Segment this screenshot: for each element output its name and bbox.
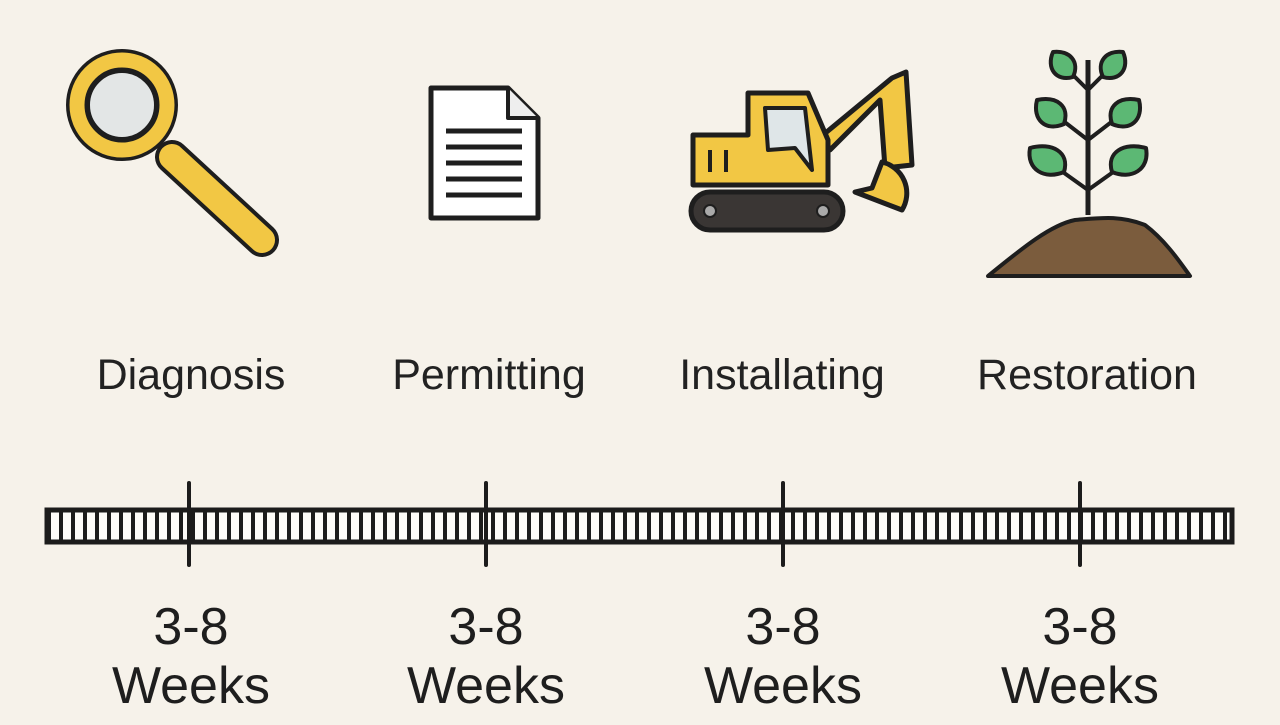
duration: phase 1: Weeks xyxy=(112,657,270,715)
duration: phase 1 xyxy=(112,598,270,715)
timeline ruler xyxy=(47,483,1232,565)
duration: phase 3: Weeks xyxy=(704,657,862,715)
duration: phase 4 xyxy=(1001,598,1159,715)
icon: excavator xyxy=(691,72,912,230)
duration: phase 4: 3-8 xyxy=(1042,598,1118,656)
label: Permitting: Permitting xyxy=(392,351,586,399)
duration: phase 2: Weeks xyxy=(407,657,565,715)
duration: phase 3: 3-8 xyxy=(745,598,821,656)
duration: phase 4: Weeks xyxy=(1001,657,1159,715)
label: Restoration: Restoration xyxy=(977,351,1197,399)
duration: phase 1: 3-8 xyxy=(153,598,229,656)
duration: phase 2 xyxy=(407,598,565,715)
label: Diagnosis: Diagnosis xyxy=(97,351,285,399)
icon: magnifying glass xyxy=(78,61,262,240)
duration: phase 2: 3-8 xyxy=(448,598,524,656)
duration: phase 3 xyxy=(704,598,862,715)
icon: plant xyxy=(988,52,1190,276)
label: Installating: Installating xyxy=(679,351,885,399)
icon: document xyxy=(431,88,538,218)
